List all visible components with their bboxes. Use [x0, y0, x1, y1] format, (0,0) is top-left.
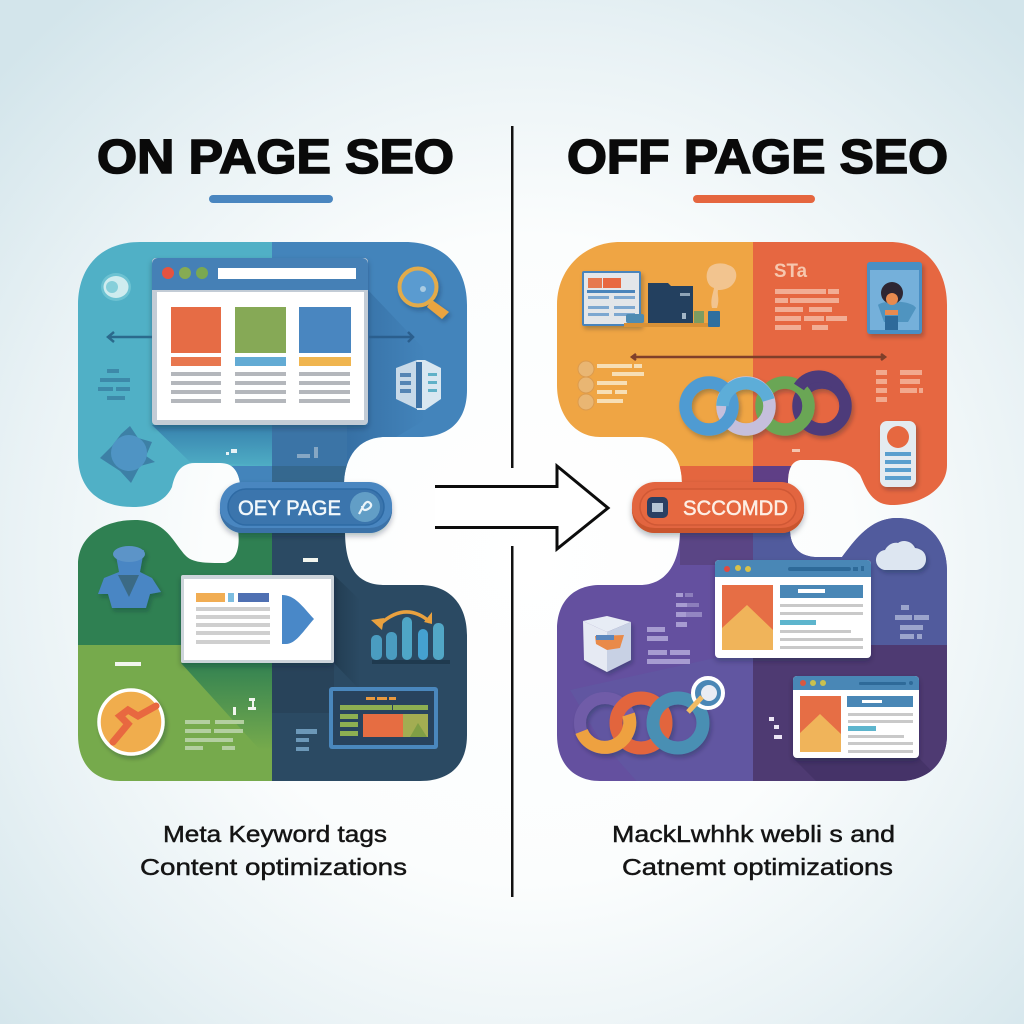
pill: oey page — [220, 482, 392, 533]
text lines: red — [775, 289, 847, 330]
marks — [769, 717, 782, 739]
panel: on page bottom — [70, 515, 472, 785]
dashboard screen — [329, 687, 438, 749]
icon: magnifier — [400, 268, 449, 319]
chain links — [686, 376, 846, 430]
caption: on page: Content optimizations — [140, 854, 407, 880]
icon: gear sun — [100, 426, 155, 483]
browser window: large — [715, 560, 871, 658]
arrow: left — [108, 332, 152, 342]
text lines: navy — [296, 729, 317, 751]
title: off page seo: OFF PAGE SEO — [567, 131, 948, 184]
smoke — [707, 263, 736, 308]
content card — [181, 575, 334, 663]
caption: off page: MackLwhhk webli s and — [612, 821, 895, 847]
folder — [648, 283, 693, 323]
text lines: right — [876, 370, 923, 402]
tag icon — [880, 421, 916, 487]
marks — [226, 449, 237, 455]
label: sta: STa — [774, 261, 807, 282]
list with icons — [578, 361, 644, 410]
text lines: left — [98, 369, 130, 400]
monitor — [582, 271, 641, 326]
title underline: off page — [693, 195, 815, 203]
caption: off page — [612, 821, 895, 880]
icon: cube — [583, 616, 631, 672]
text lines: blue — [895, 605, 929, 639]
icon: tools circle — [99, 690, 163, 754]
poster — [867, 262, 922, 334]
panel: on page top — [70, 235, 472, 515]
title: on page seo: ON PAGE SEO — [97, 131, 454, 184]
pill: oey page: OEY PAGE — [238, 497, 341, 520]
marks — [115, 558, 318, 715]
caption: off page: Catnemt optimizations — [622, 854, 893, 880]
center divider — [511, 126, 514, 897]
arrow: center — [435, 466, 608, 549]
pill: sccomdd: SCCOMDD — [683, 497, 788, 520]
panel: off page bottom — [550, 515, 955, 785]
pill: sccomdd — [632, 482, 804, 533]
browser window: small — [793, 676, 919, 758]
icon: building — [396, 360, 441, 410]
chart: bars with arc — [371, 612, 450, 664]
panel: off page top — [550, 235, 953, 510]
text lines: purple — [647, 593, 702, 664]
arrow: right — [369, 332, 413, 342]
arrow: double — [632, 354, 885, 360]
chain links: multicolor — [580, 698, 703, 748]
text lines: green — [185, 720, 244, 750]
icon: water drop — [101, 273, 131, 301]
caption: on page — [140, 821, 407, 880]
icon: cloud — [876, 541, 926, 570]
title underline: on page — [209, 195, 333, 203]
icon: pointer circle — [688, 678, 723, 712]
shelf items — [624, 311, 720, 327]
browser window — [152, 258, 368, 425]
icon: person — [98, 546, 161, 608]
caption: on page: Meta Keyword tags — [163, 821, 387, 847]
